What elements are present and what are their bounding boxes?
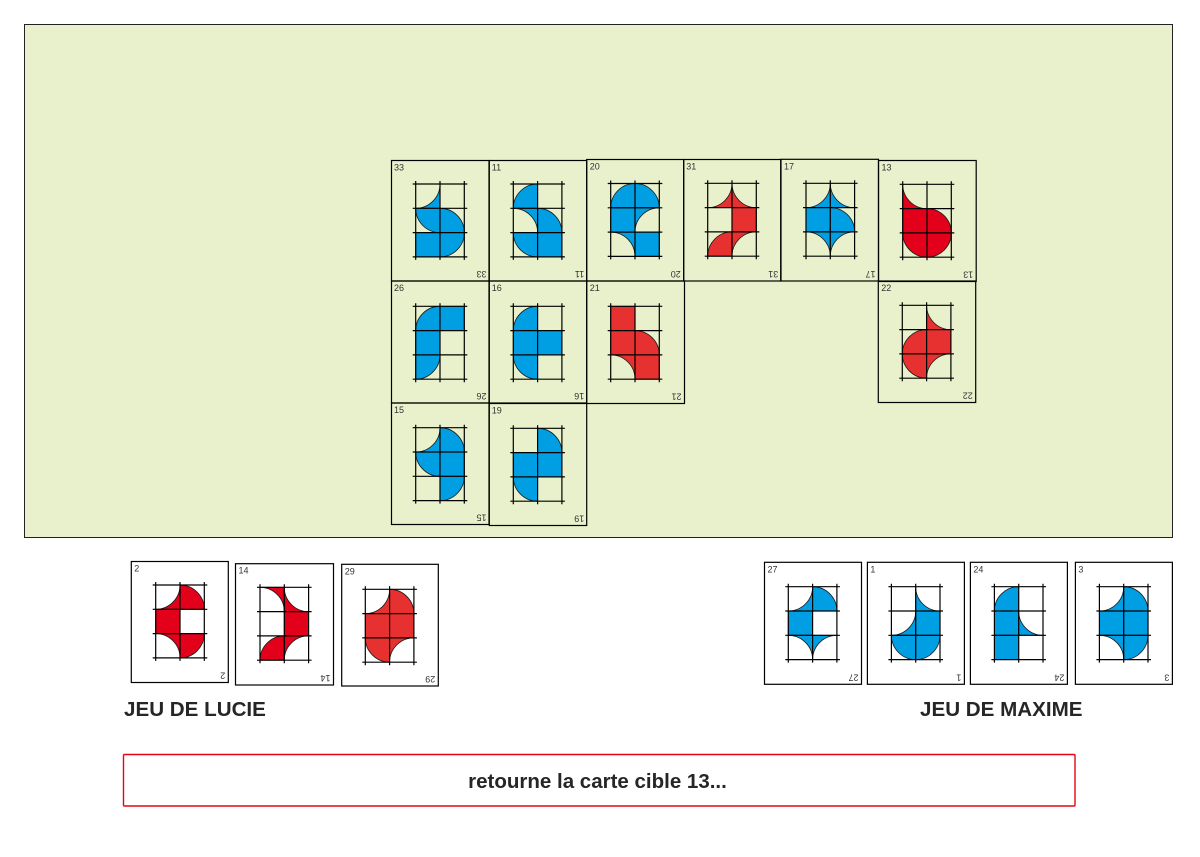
card 1 — [867, 562, 964, 684]
card 33: 33 — [476, 269, 486, 279]
card 1: 1 — [956, 672, 961, 682]
card 24 — [970, 562, 1067, 684]
card 17: 17 — [865, 269, 876, 279]
pattern 20 — [608, 180, 662, 259]
card 19 — [489, 404, 587, 526]
card 3: 3 — [1164, 672, 1169, 682]
card 21 — [587, 281, 684, 404]
pattern 33 — [413, 181, 467, 260]
pattern 19 — [510, 425, 565, 504]
card 3 — [1075, 562, 1172, 684]
card 17: 17 — [784, 161, 794, 171]
card 15 — [392, 403, 489, 524]
card 24: 24 — [1054, 672, 1064, 682]
card 14 — [236, 564, 334, 685]
card 13: 13 — [963, 270, 973, 280]
card 2 — [131, 562, 228, 682]
card 11: 11 — [492, 162, 501, 172]
card 11 — [489, 160, 587, 281]
card 22 — [878, 281, 976, 402]
card 16: 16 — [574, 391, 584, 401]
card 2: 2 — [220, 670, 225, 680]
card 14: 14 — [320, 673, 330, 683]
pattern 2 — [153, 582, 207, 661]
card 24: 24 — [973, 564, 983, 574]
card 29 — [342, 564, 438, 686]
hand: Lucie's cards — [131, 562, 438, 686]
pattern 26 — [413, 303, 467, 382]
card 22: 22 — [963, 390, 973, 400]
message text: retourne la carte cible 13... — [468, 770, 727, 793]
pattern 16 — [510, 303, 565, 382]
card 21: 21 — [671, 392, 682, 402]
pattern 17 — [803, 180, 858, 259]
card 19: 19 — [574, 514, 584, 524]
card 14: 14 — [238, 566, 249, 576]
card 33 — [392, 160, 489, 281]
card 2: 2 — [134, 564, 139, 574]
card 31: 31 — [768, 269, 778, 279]
pattern 21 — [608, 303, 662, 382]
pattern 3 — [1096, 584, 1151, 663]
card 17 — [781, 159, 878, 281]
label: Maxime's hand: JEU DE MAXIME — [920, 698, 1082, 721]
label: Lucie's hand: JEU DE LUCIE — [124, 698, 266, 721]
card 11: 11 — [575, 269, 584, 279]
pattern 14 — [257, 584, 312, 663]
card 20: 20 — [590, 162, 600, 172]
pattern 11 — [510, 181, 565, 260]
card 3: 3 — [1078, 564, 1083, 574]
pattern 22 — [899, 302, 954, 381]
card 20: 20 — [671, 269, 681, 279]
panel: game board — [24, 24, 1172, 538]
pattern 1 — [888, 584, 943, 663]
card 21: 21 — [590, 283, 600, 293]
card 29: 29 — [345, 566, 355, 576]
pattern 29 — [362, 586, 417, 665]
card 26: 26 — [394, 283, 404, 293]
pattern 31 — [705, 180, 759, 259]
card 13: 13 — [882, 162, 892, 172]
card 16 — [489, 281, 587, 403]
card 1: 1 — [870, 564, 875, 574]
cards on the board — [392, 159, 976, 526]
card 29: 29 — [425, 674, 435, 684]
message box — [124, 754, 1075, 806]
card 16: 16 — [492, 283, 502, 293]
card 22: 22 — [881, 283, 891, 293]
pattern 27 — [785, 584, 840, 663]
card 31 — [684, 160, 781, 281]
card 19: 19 — [492, 406, 502, 416]
pattern 24 — [991, 584, 1046, 663]
pattern 15 — [413, 425, 467, 504]
card 33: 33 — [394, 162, 404, 172]
card 13 — [878, 160, 976, 282]
hand: Maxime's cards — [764, 562, 1172, 684]
card 20 — [587, 160, 684, 281]
pattern 13 — [900, 181, 954, 260]
card 15: 15 — [394, 405, 404, 415]
card 27 — [764, 562, 862, 684]
card 26 — [392, 281, 489, 403]
card 15: 15 — [476, 512, 486, 522]
card 31: 31 — [686, 162, 696, 172]
card 26: 26 — [476, 391, 486, 401]
card 27: 27 — [848, 672, 858, 682]
card 27: 27 — [768, 564, 778, 574]
